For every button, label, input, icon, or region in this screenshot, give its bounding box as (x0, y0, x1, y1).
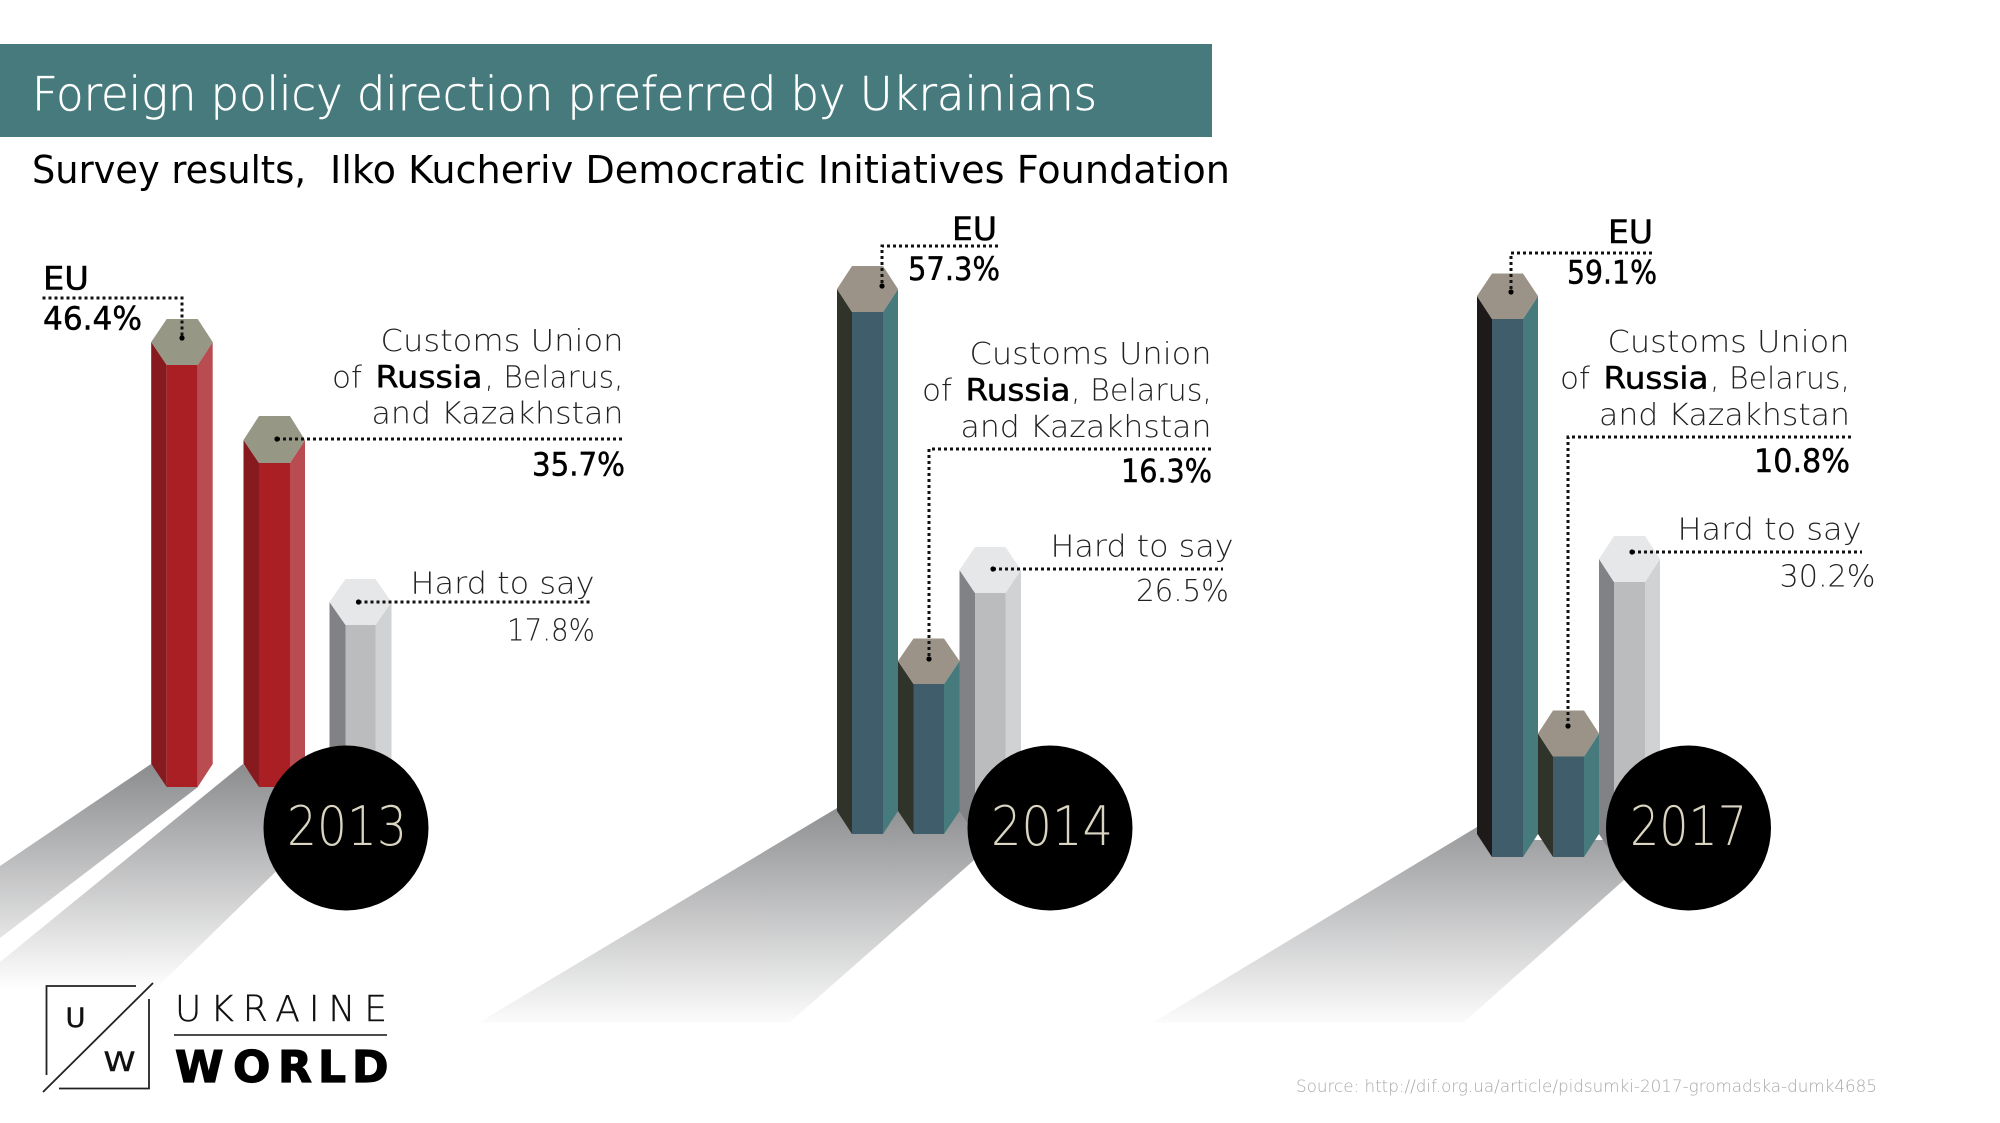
panel: 2014 (478, 210, 1234, 1023)
label: Customs Union 35.7%: Customs Union (380, 324, 624, 359)
label: Hard to say 26.5%: 26.5% (1136, 574, 1229, 609)
label: Hard to say 17.8%: Hard to say (410, 566, 594, 602)
panel: 2017 (1152, 213, 1876, 1023)
year badge 2013 (264, 746, 428, 910)
label: Hard to say 30.2%: 30.2% (1780, 560, 1876, 594)
label: Customs Union 10.8%: 10.8% (1754, 442, 1850, 480)
label: Hard to say 30.2%: Hard to say (1678, 512, 1862, 548)
label: Customs Union 16.3%: , Belarus, (1071, 374, 1212, 408)
label: EU 46.4% (42, 260, 185, 341)
label: Hard to say 17.8%: 17.8% (507, 614, 595, 648)
label: EU 59.1%: 59.1% (1567, 254, 1657, 292)
label: Customs Union 35.7%: 35.7% (532, 446, 625, 484)
label: Customs Union 10.8%: and Kazakhstan (1599, 398, 1850, 433)
panel: 2013 (0, 260, 625, 1000)
label: EU 57.3%: 57.3% (908, 250, 1000, 288)
column: EU 2017 (1477, 274, 1538, 857)
year badge 2014 (968, 746, 1132, 910)
label: Customs Union 10.8%: , Belarus, (1710, 362, 1850, 396)
label: Customs Union 16.3%: Customs Union (970, 337, 1212, 372)
column: EU 2014 (837, 266, 898, 834)
label: EU 57.3% (879, 210, 1000, 289)
label: EU 59.1% (1508, 213, 1657, 295)
label: Customs Union 35.7% (274, 324, 625, 484)
label: Customs Union 10.8%: Customs Union (1608, 325, 1850, 360)
label: EU 57.3%: EU (952, 210, 997, 248)
label: Hard to say 26.5%: Hard to say (1050, 530, 1234, 564)
label: Hard to say 30.2% (1629, 512, 1876, 594)
label: Customs Union 10.8%: Russia (1604, 362, 1708, 396)
subtitle: Survey results, (32, 148, 306, 192)
label: Customs Union 16.3%: 16.3% (1121, 452, 1212, 490)
label: Customs Union 35.7%: of (332, 360, 362, 396)
column: Customs Union 2017 (1538, 710, 1599, 857)
year badge 2014: 2014 (991, 795, 1113, 858)
column: Customs Union 2014 (898, 638, 960, 834)
logo: Ukraine World: WORLD (175, 1042, 389, 1093)
label: Customs Union 10.8% (1560, 325, 1851, 729)
label: Customs Union 16.3%: and Kazakhstan (960, 410, 1212, 445)
label: EU 46.4%: 46.4% (43, 300, 142, 338)
label: Customs Union 16.3%: Russia (966, 374, 1070, 408)
logo: Ukraine World: W (104, 1047, 136, 1078)
column: Hard to say 2013 (330, 579, 392, 787)
label: EU 59.1%: EU (1608, 213, 1653, 251)
logo: Ukraine World: U (66, 1003, 86, 1034)
column: Customs Union 2013 (244, 416, 305, 787)
source note: Source: http://dif.org.ua/article/pidsumki-2017-gromadska-dumk4685 (1296, 1077, 1877, 1097)
label: EU 46.4%: EU (43, 260, 89, 298)
subtitle: Ilko Kucheriv Democratic Initiatives Foundation (330, 148, 1230, 192)
label: Customs Union 35.7%: Russia (376, 360, 482, 396)
label: Customs Union 35.7%: and Kazakhstan (372, 396, 624, 432)
logo: Ukraine World (43, 983, 389, 1093)
label: Customs Union 16.3% (922, 337, 1212, 662)
column: EU 2013 (151, 319, 213, 787)
label: Customs Union 10.8%: of (1560, 362, 1590, 396)
label: Customs Union 16.3%: of (922, 374, 952, 408)
label: Hard to say 17.8% (356, 566, 595, 648)
logo: Ukraine World: UKRAINE (175, 989, 387, 1030)
column: Hard to say 2017 (1599, 536, 1660, 857)
column: Hard to say 2014 (960, 547, 1021, 834)
year badge 2017 (1606, 746, 1771, 910)
label: Hard to say 26.5% (990, 530, 1234, 609)
label: Customs Union 35.7%: , Belarus, (484, 360, 624, 396)
year badge 2017: 2017 (1630, 795, 1747, 858)
title banner (0, 44, 1212, 137)
year badge 2013: 2013 (287, 795, 407, 858)
title banner: Foreign policy direction preferred by Ukrainians (32, 67, 1097, 121)
